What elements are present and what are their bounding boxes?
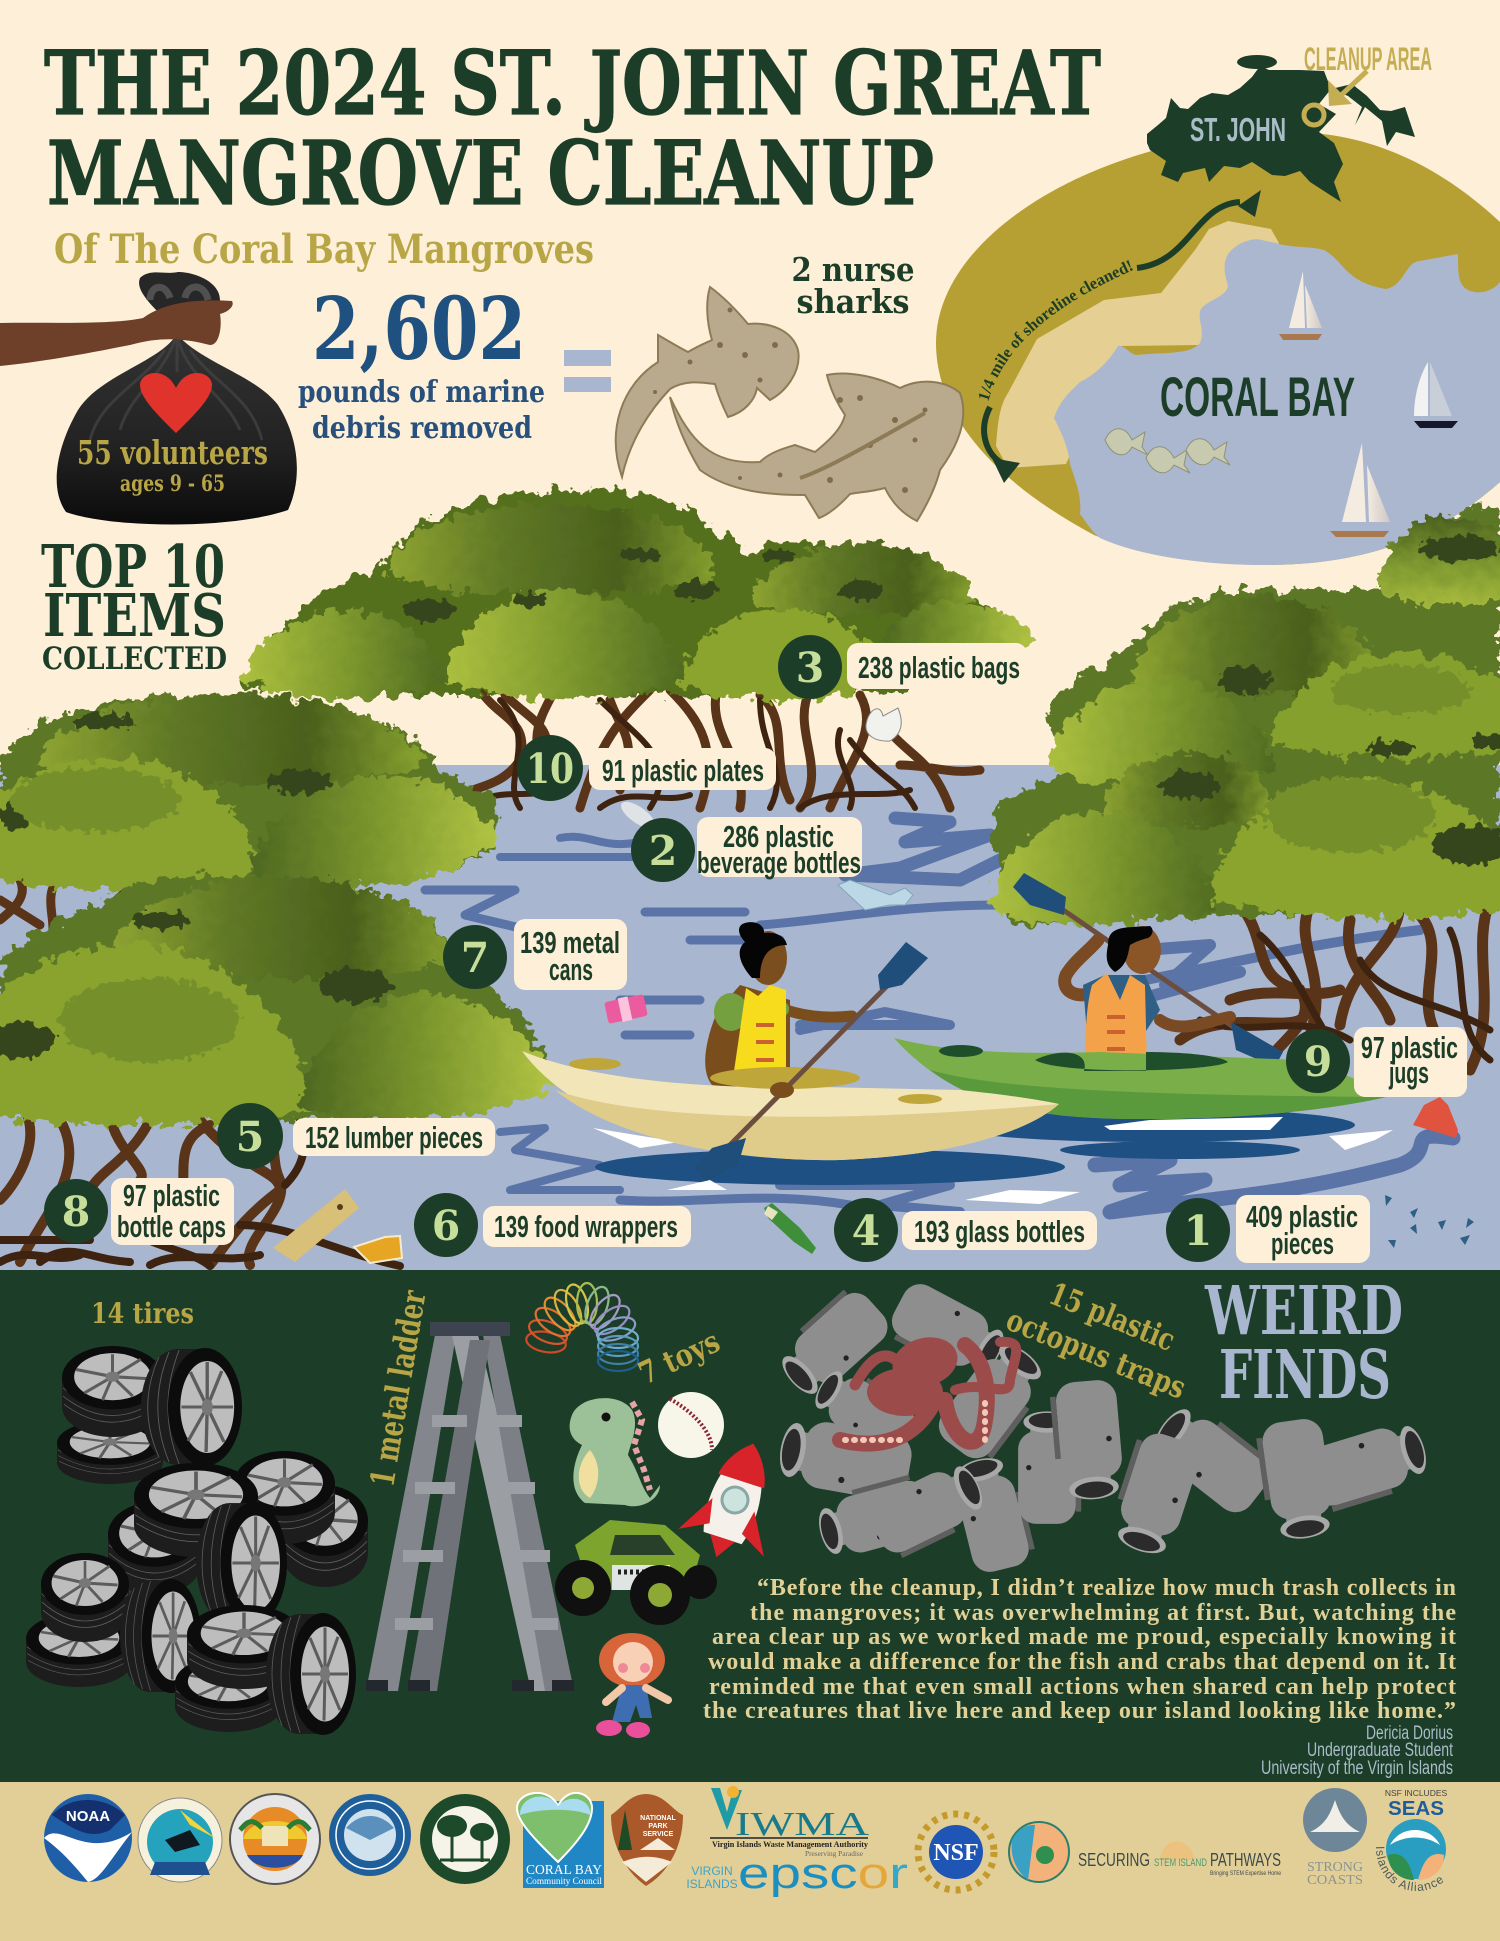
roots — [0, 1110, 400, 1266]
item 10 label: 10 — [526, 745, 574, 793]
shore sand — [996, 221, 1279, 468]
kayak: cream — [522, 1051, 1059, 1160]
logo: Securing STEM Island Pathways: PATHWAYS — [1210, 1850, 1281, 1870]
icon: tire piles — [26, 1346, 368, 1735]
debris: food wrapper — [354, 1236, 402, 1263]
icon: sailboat 2 — [1414, 362, 1458, 428]
debris: metal can — [604, 994, 648, 1024]
heading: weird finds: FINDS — [1219, 1335, 1391, 1414]
head — [1107, 926, 1161, 974]
tree: left lower mangrove — [0, 877, 552, 1266]
logo: SEAS Islands Alliance: NSF INCLUDES — [1385, 1788, 1448, 1798]
label: 14 tires: 14 tires — [91, 1297, 194, 1330]
debris: plastic jug — [1413, 1097, 1458, 1138]
item 6 label: 6 — [432, 1202, 460, 1250]
label: 2 nurse sharks: sharks — [796, 282, 910, 321]
title — [44, 31, 1101, 225]
item 8 label: 97 plastic — [123, 1178, 220, 1213]
icon: ladder — [366, 1322, 574, 1691]
item 1 label: 409 plastic — [1246, 1199, 1358, 1234]
logo: SEAS Islands Alliance: Islands Alliance — [1376, 1847, 1443, 1891]
icon: fish school — [1105, 429, 1230, 473]
logo: Coral Bay Community Council: CORAL BAY — [526, 1862, 602, 1877]
label: 7 toys: 7 toys — [633, 1324, 725, 1392]
arms — [1065, 940, 1098, 995]
debris: glass bottle — [764, 1203, 816, 1254]
quote: the creatures that live here and keep our island looking like home.” — [703, 1698, 1456, 1724]
life vest — [1084, 973, 1147, 1070]
tree: right mangrove — [989, 505, 1500, 1070]
item 9 label — [1286, 1027, 1467, 1097]
roots — [1180, 900, 1490, 1070]
roots — [455, 680, 980, 808]
label: 15 plastic octopus traps: octopus traps — [1001, 1302, 1191, 1407]
icon: toy rocket — [674, 1430, 796, 1571]
logo: National Park Service: SERVICE — [643, 1831, 674, 1838]
icon: octopus traps — [769, 1278, 1434, 1576]
quote: would make a difference for the fish and crabs that depend on it. It — [708, 1649, 1456, 1675]
attribution: Undergraduate Student — [1307, 1740, 1454, 1761]
logo: USVI mangroves — [420, 1794, 510, 1884]
map: Coral Bay: 1/4 mile of shoreline cleaned! — [979, 260, 1133, 401]
logo: Virgin Islands EPSCoR: VIRGIN — [691, 1864, 733, 1878]
item 5 label — [217, 1103, 495, 1169]
item 1 label: 1 — [1184, 1207, 1212, 1255]
canopy base — [996, 505, 1500, 925]
quote: the mangroves; it was overwhelming at first. But, watching the — [750, 1600, 1456, 1626]
debris: plastic plate — [617, 797, 659, 833]
item 9 label: 97 plastic — [1361, 1030, 1458, 1065]
label: 2 nurse sharks — [792, 250, 914, 321]
logo: Coral Bay Community Council — [517, 1793, 604, 1888]
item 2 label: 2 — [649, 827, 677, 875]
logo: NSF — [918, 1814, 994, 1890]
item 4 label: 4 — [852, 1207, 880, 1255]
item 8 label: 8 — [62, 1188, 90, 1236]
arrow: shoreline south — [984, 407, 1020, 483]
logo: NOAA: NOAA — [66, 1808, 110, 1825]
canopy base — [240, 490, 1032, 695]
heading: weird finds: WEIRD — [1204, 1271, 1403, 1350]
item 5 label: 152 lumber pieces — [305, 1120, 483, 1155]
logo: NOAA — [44, 1794, 132, 1882]
logo: National Park Service — [611, 1794, 683, 1886]
item 8 label: bottle caps — [117, 1209, 226, 1244]
logo: Securing STEM Island Pathways: SECURING — [1078, 1850, 1150, 1870]
heading: top 10 items collected — [41, 532, 227, 677]
stat: pounds of debris: 2,602 — [312, 279, 526, 380]
title: THE 2024 ST. JOHN GREAT — [44, 31, 1101, 135]
logo: SEAS Islands Alliance: SEAS — [1388, 1798, 1444, 1820]
tree: back center mangrove — [240, 490, 1032, 808]
heading: top 10 items collected: TOP 10 — [41, 532, 225, 601]
logo: NSF: NSF — [933, 1840, 979, 1866]
item 7 label: 139 metal — [520, 925, 620, 960]
item 4 label — [834, 1198, 1097, 1262]
logo: VIWMA — [710, 1786, 870, 1858]
logo: National Park Service: PARK — [648, 1823, 668, 1830]
logo: Strong Coasts: STRONG — [1307, 1860, 1363, 1875]
item 2 label — [631, 817, 862, 882]
volunteers count: 55 volunteers — [77, 433, 268, 472]
logo: Strong Coasts — [1303, 1788, 1367, 1888]
label: 15 plastic octopus traps: 15 plastic — [1044, 1276, 1180, 1359]
logo: VIWMA: Virgin Islands Waste Management Authority — [712, 1839, 869, 1849]
logo: VIWMA: IWMA — [735, 1806, 870, 1843]
icon: toy doll — [596, 1633, 668, 1738]
logo: SEAS Islands Alliance — [1376, 1788, 1448, 1891]
icon: octopus — [840, 1330, 1016, 1444]
item 7 label — [443, 919, 627, 990]
logo: National Park Service: NATIONAL — [640, 1815, 677, 1822]
item 3 label — [778, 635, 1027, 699]
debris: lumber — [273, 1189, 359, 1262]
logo: Securing STEM Island Pathways — [1078, 1841, 1281, 1877]
panel: partner logos — [0, 1782, 1500, 1941]
item 9 label: 9 — [1304, 1038, 1332, 1086]
kayak shadow and foam — [593, 1108, 1393, 1204]
logo: Securing STEM Island Pathways: STEM ISLAND — [1154, 1857, 1207, 1869]
water ripples — [425, 818, 1453, 1212]
item 2 label: beverage bottles — [697, 845, 861, 880]
item 8 label — [44, 1178, 234, 1245]
icon: monster truck — [555, 1520, 717, 1625]
volunteers ages: ages 9 - 65 — [120, 471, 225, 497]
item 4 label: 193 glass bottles — [914, 1214, 1085, 1249]
logo: Virgin Islands EPSCoR: ISLANDS — [686, 1877, 738, 1891]
water — [0, 765, 1500, 1270]
bay water — [1054, 239, 1500, 565]
heading: top 10 items collected: ITEMS — [43, 581, 226, 650]
heading: top 10 items collected: COLLECTED — [42, 641, 227, 677]
item 5 label: 5 — [236, 1113, 264, 1161]
paddle: front kayaker — [694, 942, 928, 1181]
item 7 label: 7 — [461, 934, 489, 982]
item 1 label: pieces — [1271, 1226, 1334, 1261]
icon: heart — [140, 373, 212, 433]
quote: reminded me that even small actions when shared can help protect — [709, 1674, 1456, 1700]
icon: toy dinosaur — [570, 1398, 660, 1506]
logo: CMES — [329, 1794, 411, 1876]
island label: ST. JOHN — [1190, 111, 1286, 148]
quote: “Before the cleanup, I didn’t realize how much trash collects in — [757, 1575, 1456, 1601]
shirt — [1083, 975, 1160, 1070]
label: 2 nurse sharks: 2 nurse — [792, 250, 914, 289]
icon: slinky toy — [525, 1282, 638, 1371]
shoreline text — [988, 266, 1142, 402]
item 6 label — [414, 1193, 691, 1257]
item 7 label: cans — [549, 952, 593, 987]
subtitle: Of The Coral Bay Mangroves — [54, 226, 594, 273]
item 3 label: 3 — [796, 644, 824, 692]
attribution — [1261, 1723, 1454, 1779]
map: Coral Bay — [936, 41, 1500, 565]
canopy base — [0, 877, 552, 1121]
debris: plastic bag — [866, 708, 901, 741]
head — [739, 922, 787, 985]
debris: plastic pieces — [1385, 1195, 1474, 1248]
heading: weird finds — [1204, 1271, 1403, 1414]
kayak: green — [894, 1038, 1386, 1119]
attribution: Dericia Dorius — [1366, 1723, 1453, 1744]
item 3 label: 238 plastic bags — [858, 650, 1020, 685]
stat: pounds of debris — [298, 279, 545, 446]
kayaker: rear person and paddle — [1013, 873, 1283, 1070]
debris: plastic bottle — [838, 880, 913, 910]
logo: Virgin Islands EPSCoR: epsc or — [738, 1849, 908, 1898]
icon: sailboat 3 — [1330, 443, 1390, 537]
logo: Navigating Home — [1009, 1822, 1069, 1882]
St. John island — [1147, 55, 1415, 202]
stat: pounds of debris: pounds of marine — [298, 375, 545, 410]
quote — [703, 1575, 1456, 1724]
item 9 label: jugs — [1388, 1055, 1429, 1090]
logo: Securing STEM Island Pathways: Bringing STEM Expertise Home — [1210, 1870, 1281, 1877]
icon: baseball — [658, 1392, 724, 1458]
icon: trash bag held by hand — [0, 272, 297, 524]
bay label: CORAL BAY — [1160, 365, 1355, 428]
logo: Coral Bay Community Council: Community Council — [526, 1876, 603, 1886]
icon: nurse sharks — [616, 287, 963, 521]
arrow: shoreline north — [1137, 190, 1261, 268]
item 10 label — [517, 735, 776, 801]
title: MANGROVE CLEANUP — [47, 121, 934, 225]
icon: sailboat 1 — [1279, 271, 1322, 340]
kayaker: front person — [705, 922, 852, 1095]
roots — [0, 870, 250, 945]
logo: UVI — [230, 1794, 320, 1884]
paddle — [1013, 873, 1283, 1067]
tree: left upper mangrove — [0, 694, 497, 945]
canopy base — [0, 696, 495, 885]
item 10 label: 91 plastic plates — [602, 753, 764, 788]
panel: weird finds — [0, 1270, 1500, 1782]
equals sign — [564, 350, 611, 392]
logo: VIWMA: Preserving Paradise — [805, 1850, 863, 1858]
item 6 label: 139 food wrappers — [494, 1209, 678, 1244]
logo: Strong Coasts: COASTS — [1307, 1873, 1363, 1888]
label: 1 metal ladder: 1 metal ladder — [362, 1287, 434, 1489]
land — [936, 132, 1500, 565]
stat: pounds of debris: debris removed — [312, 411, 532, 446]
cleanup area marker — [1304, 71, 1367, 125]
logo: DPNR — [138, 1798, 222, 1882]
quote: area clear up as we worked made me proud, especially knowing it — [712, 1624, 1456, 1650]
label: 15 plastic octopus traps — [1001, 1276, 1191, 1407]
item 2 label: 286 plastic — [723, 819, 834, 854]
item 1 label — [1166, 1195, 1370, 1263]
